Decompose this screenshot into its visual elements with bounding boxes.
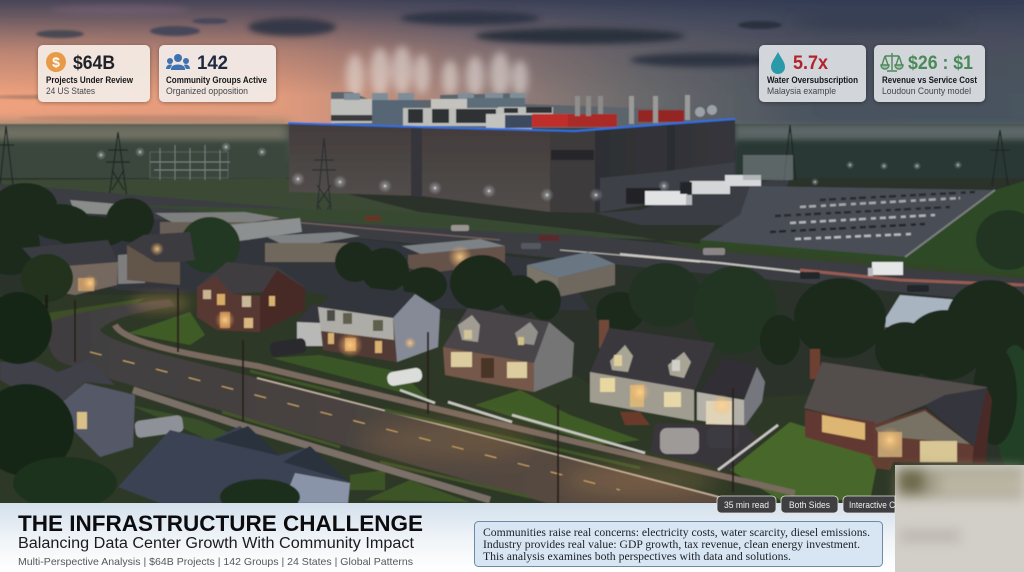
house: bottom left [0,360,184,457]
obscured corner patch [895,465,1024,572]
house: back left [22,240,145,295]
ground base [0,178,1024,510]
stat card: community groups: 142 [197,53,228,74]
house: brick ranch [804,349,992,470]
stat card: revenue: Loudoun County model [882,86,971,97]
blue roof line [288,119,735,131]
main street [48,295,795,503]
tree front of back house [21,254,73,309]
sidewalks and curbs [115,325,795,493]
stat card: water [759,45,866,102]
stat card: revenue: $26 : $1 [908,53,973,74]
sky [0,0,1024,160]
parked cars on driveways [269,338,423,387]
substation [150,145,230,180]
foreground trees [0,292,300,515]
picket fences [400,390,778,470]
house: cape with garage [590,320,765,470]
parking lot [700,155,1024,278]
stat card: water: Malaysia example [767,86,836,97]
stat card: community groups: Community Groups Active [166,75,267,86]
white truck [868,262,903,276]
icon: people [166,54,190,70]
stat card: projects: 24 US States [46,86,95,97]
dark corner columns [411,127,422,197]
distant haze and treeline [0,122,1024,194]
stat card: community groups [159,45,276,102]
lane dashes [90,352,620,490]
mid trees [0,183,1024,475]
pill: interactive: Interactive C [849,500,895,510]
stat card: projects: $64B [73,53,115,74]
far left field [0,178,660,240]
truck yard [595,178,790,225]
summary box: This analysis examines both perspectives with data and solutions. [483,549,791,563]
stat card: revenue: Revenue vs Service Cost [882,75,978,86]
title: THE INFRASTRUCTURE CHALLENGE [18,511,423,536]
parked cars [770,192,975,239]
stat card: water: 5.7x [793,53,828,74]
pill: interactive [843,496,895,513]
highway [0,183,1024,305]
bottom title panel [0,503,895,572]
house: brick [197,262,305,332]
pill: both sides [781,496,838,513]
summary box [474,522,882,566]
utility poles [75,288,733,503]
icon: dollar coin: $ [52,54,60,70]
data center building [288,46,790,225]
porch glows [82,275,903,453]
driveway [650,423,760,470]
commercial buildings [0,200,960,347]
wall lights [291,172,670,202]
stat card: revenue [874,45,985,102]
left towers [0,125,1010,198]
loading docks [600,162,761,212]
summary box: Industry provides real value: GDP growth, tax revenue, clean energy investment. [483,537,860,551]
icon: water drop [771,52,785,74]
stat card: projects: Projects Under Review [46,75,134,86]
rooftop equipment [331,92,717,129]
right wall [595,119,735,213]
pill: read time [717,496,776,513]
pill: read time: 35 min read [724,500,769,510]
house: white colonial [297,285,440,362]
tag pills [717,496,895,513]
transmission tower [312,138,336,232]
icon: balance scale [881,53,903,71]
distant street lights [96,142,962,195]
stat card: community groups: Organized opposition [166,86,248,97]
neighbourhood lawns [0,290,1024,510]
left wall [289,124,422,196]
summary box: Communities raise real concerns: electricity costs, water scarcity, diesel emissions. [483,525,870,539]
stat card: projects [38,45,150,102]
steam plumes [346,46,528,98]
house: bottom centre roof [118,426,350,503]
house: cape with dormer [443,308,574,392]
pill: both sides: Both Sides [789,500,830,510]
meta line: Multi-Perspective Analysis | $64B Projects | 142 Groups | 24 States | Global Patterns [18,556,413,568]
house: back centre [127,232,195,285]
stat card: water: Water Oversubscription [767,75,858,86]
subtitle: Balancing Data Center Growth With Community Impact [18,535,415,552]
